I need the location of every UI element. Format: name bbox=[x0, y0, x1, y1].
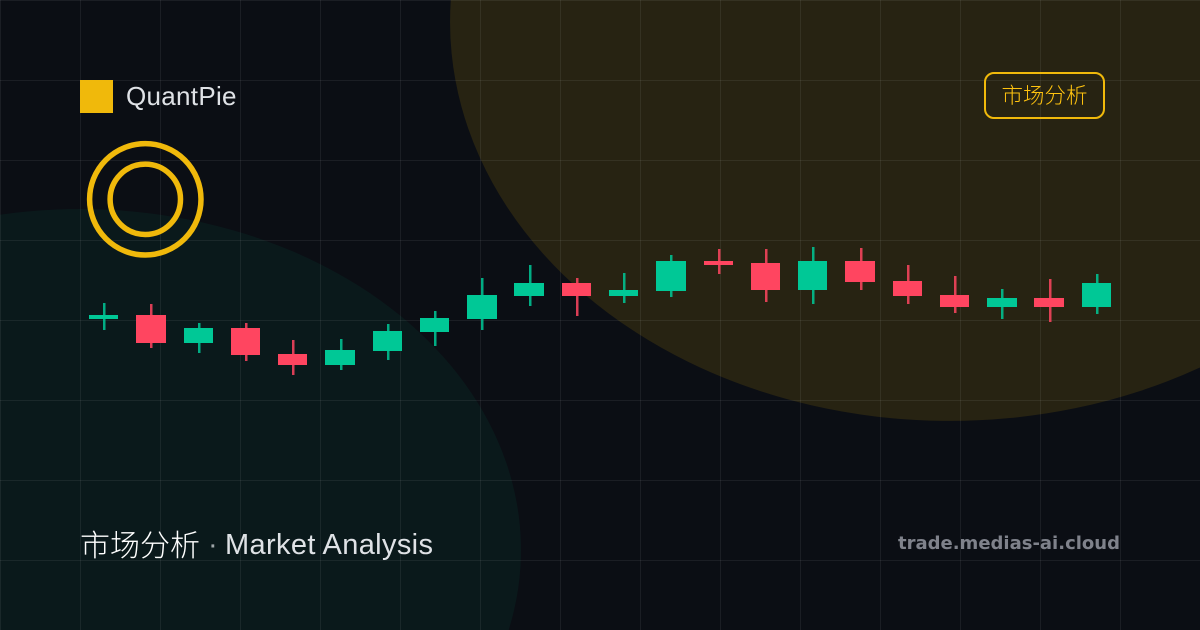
headline bbox=[80, 524, 433, 565]
tag: market analysis badge bbox=[984, 72, 1105, 119]
logo square bbox=[80, 80, 113, 113]
brand name: QuantPie bbox=[126, 81, 237, 111]
domain: trade.medias-ai.cloud bbox=[898, 533, 1120, 554]
tag: market analysis badge: 市场分析 bbox=[1001, 79, 1088, 110]
headline: · bbox=[208, 529, 218, 561]
icon: concentric rings bbox=[86, 140, 204, 258]
headline: Market Analysis bbox=[225, 529, 433, 561]
